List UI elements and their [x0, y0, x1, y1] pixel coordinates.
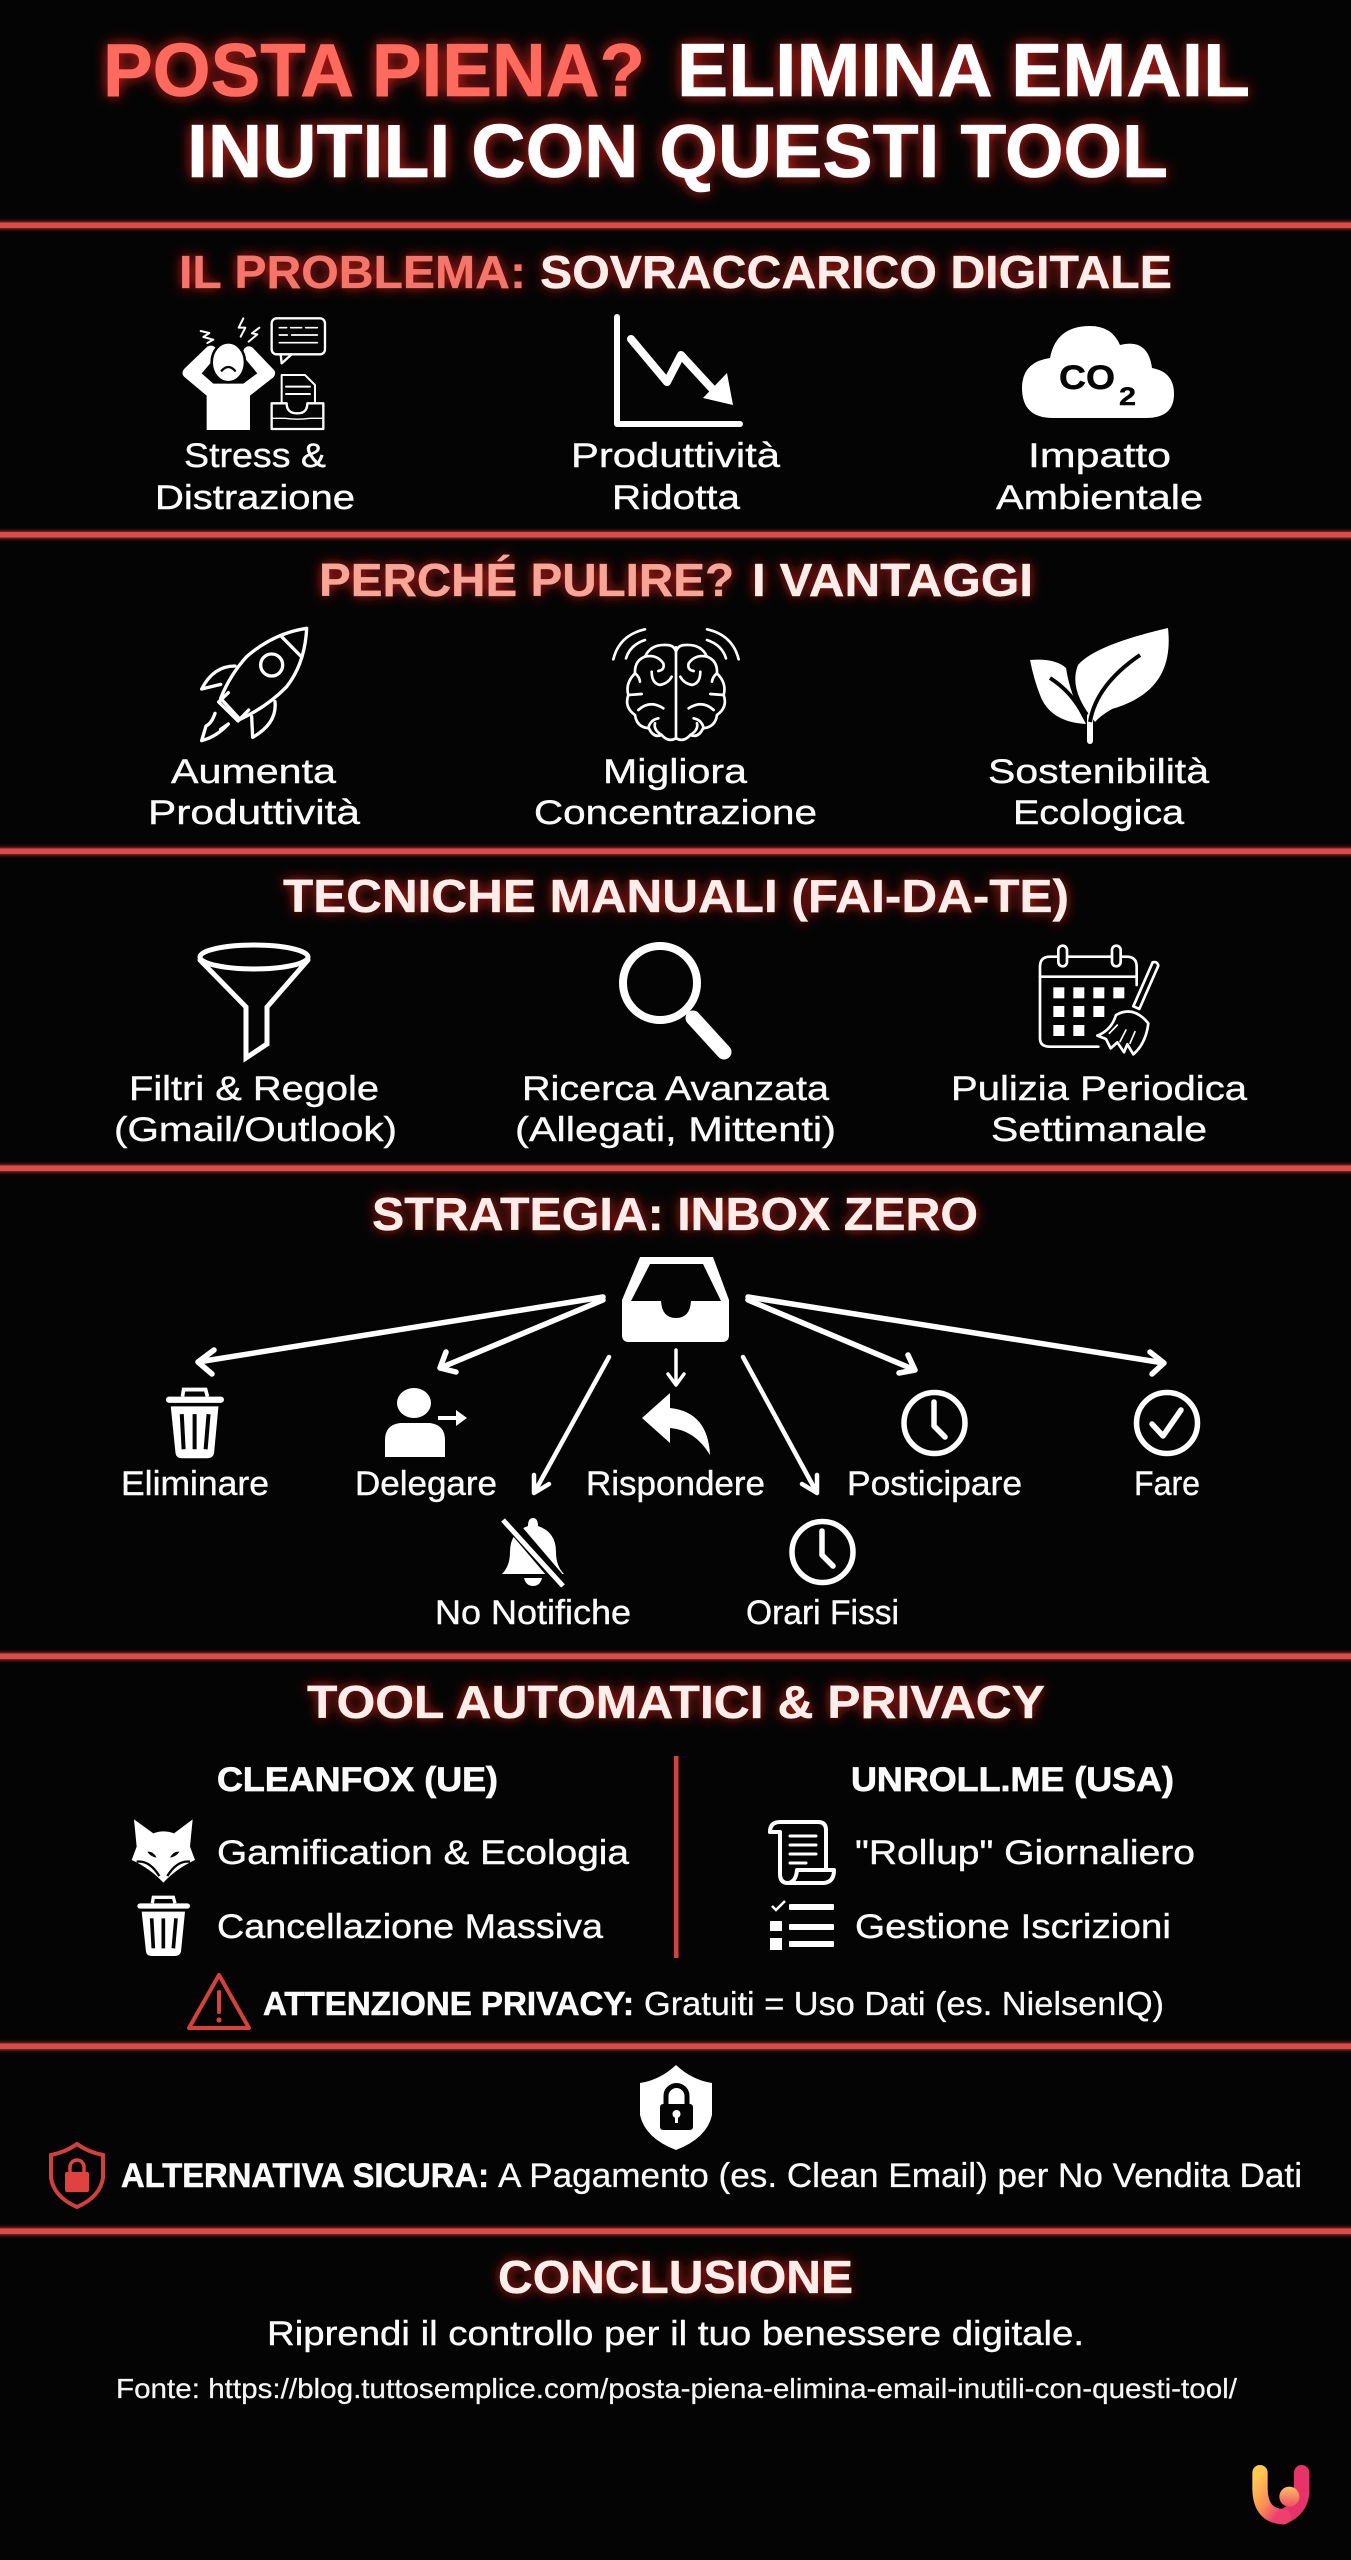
- label: filtri e regole: [114, 1070, 397, 1149]
- icon: calendar and broom: [1040, 946, 1158, 1054]
- label: impatto ambientale: Ambientale: [996, 479, 1203, 517]
- label: stress e distrazione: Distrazione: [155, 479, 355, 517]
- label: stress e distrazione: Stress &: [184, 437, 326, 475]
- heading: il problema: IL PROBLEMA:: [179, 246, 526, 298]
- label: delegare: Delegare: [355, 1465, 497, 1503]
- icon: rocket: [202, 628, 307, 741]
- label: cancellazione: Cancellazione Massiva: [217, 1908, 603, 1946]
- heading: il problema: SOVRACCARICO DIGITALE: [540, 246, 1172, 298]
- label: aumenta produttivita: Aumenta: [171, 753, 336, 791]
- label: sostenibilita ecologica: Sostenibilità: [988, 753, 1209, 791]
- icon: co2 cloud: 2: [1119, 383, 1136, 411]
- icon: magnifier: [623, 946, 724, 1052]
- text: source: Fonte: https://blog.tuttosemplice.com/posta-piena-elimina-email-inutili-con-questi-tool/: [116, 2373, 1237, 2404]
- callout: alternativa sicura: [121, 2157, 1302, 2195]
- panel: alternativa sicura: [51, 2065, 1302, 2207]
- callout: alternativa sicura: ALTERNATIVA SICURA:: [121, 2157, 489, 2195]
- dividers: [0, 222, 1351, 2234]
- label: migliora concentrazione: Migliora: [603, 753, 747, 791]
- arrows: [198, 1297, 1164, 1493]
- label: sostenibilita ecologica: Ecologica: [1013, 794, 1184, 832]
- label: produttivita ridotta: Ridotta: [612, 479, 740, 517]
- title: INUTILI CON QUESTI TOOL: [187, 109, 1168, 193]
- title: ELIMINA EMAIL: [677, 28, 1250, 112]
- label: gestione iscrizioni: Gestione Iscrizioni: [855, 1908, 1171, 1946]
- heading: strategia inbox zero: STRATEGIA: INBOX ZERO: [372, 1188, 978, 1240]
- text: conclusion line: Riprendi il controllo per il tuo benessere digitale.: [267, 2315, 1084, 2353]
- icon: checklist: [770, 1901, 834, 1950]
- label: filtri e regole: (Gmail/Outlook): [114, 1111, 397, 1149]
- panel: inbox zero: [121, 1188, 1200, 1632]
- icon: clock orari fissi: [792, 1522, 853, 1582]
- callout: alternativa sicura: A Pagamento (es. Clean Email) per No Vendita Dati: [498, 2157, 1302, 2195]
- label: migliora concentrazione: [534, 753, 817, 832]
- label: orari fissi: Orari Fissi: [746, 1594, 899, 1632]
- icon: warning triangle: [189, 1975, 249, 2028]
- label: ricerca avanzata: Ricerca Avanzata: [522, 1070, 829, 1108]
- icon: scroll: [770, 1822, 834, 1883]
- panel: tool automatici: [132, 1676, 1195, 2028]
- label: migliora concentrazione: Concentrazione: [534, 794, 817, 832]
- icon: red shield lock: [51, 2144, 103, 2207]
- callout: attenzione privacy: ATTENZIONE PRIVACY:: [263, 1985, 634, 2022]
- icon: delegate person: [385, 1388, 467, 1457]
- icon: stress: [182, 318, 325, 430]
- panel: il problema: [155, 246, 1203, 517]
- icon: trash: [166, 1390, 224, 1458]
- label: aumenta produttivita: [148, 753, 360, 832]
- icon: logo: [1260, 2473, 1302, 2517]
- icon: co2 cloud: CO: [1059, 359, 1115, 397]
- label: impatto ambientale: Impatto: [1028, 437, 1171, 475]
- heading: perche pulire: PERCHÉ PULIRE?: [319, 554, 734, 606]
- label: filtri e regole: Filtri & Regole: [129, 1070, 379, 1108]
- label: no notifiche: No Notifiche: [435, 1594, 631, 1632]
- heading: il problema: [179, 246, 1172, 298]
- icon: bell muted: [502, 1518, 564, 1586]
- title: POSTA PIENA?: [103, 28, 645, 112]
- label: fare: Fare: [1134, 1465, 1200, 1503]
- label: pulizia periodica: Settimanale: [991, 1111, 1207, 1149]
- label: sostenibilita ecologica: [988, 753, 1209, 832]
- panel: tecniche manuali: [114, 870, 1247, 1149]
- label: posticipare: Posticipare: [847, 1465, 1022, 1503]
- heading: perche pulire: [319, 554, 1033, 606]
- label: pulizia periodica: Pulizia Periodica: [951, 1070, 1247, 1108]
- icon: productivity chart: [617, 317, 740, 424]
- icon: clock posticipare: [904, 1392, 965, 1454]
- label: pulizia periodica: [951, 1070, 1247, 1149]
- icon: fox and trash: [132, 1819, 195, 1956]
- label: ricerca avanzata: [515, 1070, 836, 1149]
- heading: tecniche manuali: TECNICHE MANUALI (FAI-DA-TE): [283, 870, 1069, 922]
- icon: white shield lock: [640, 2065, 712, 2150]
- icon: funnel: [200, 945, 308, 1058]
- label: stress e distrazione: [155, 437, 355, 517]
- label: produttivita ridotta: [571, 437, 780, 517]
- label: rollup: "Rollup" Giornaliero: [855, 1834, 1195, 1872]
- icon: leaf: [1030, 628, 1169, 741]
- label: produttivita ridotta: Produttività: [571, 437, 780, 475]
- heading: unroll.me: UNROLL.ME (USA): [851, 1761, 1174, 1799]
- icon: inbox tray: [622, 1257, 729, 1342]
- label: impatto ambientale: [996, 437, 1203, 517]
- heading: perche pulire: I VANTAGGI: [752, 554, 1033, 606]
- label: gamification: Gamification & Ecologia: [217, 1834, 629, 1872]
- label: eliminare: Eliminare: [121, 1465, 269, 1503]
- icon: check circle: [1136, 1392, 1198, 1454]
- heading: tool automatici: TOOL AUTOMATICI & PRIVACY: [307, 1676, 1045, 1728]
- title: [103, 28, 1250, 193]
- panel: vantaggi: [148, 554, 1209, 832]
- icon: co2 cloud: [1022, 326, 1174, 418]
- icon: brain: [613, 629, 739, 740]
- heading: cleanfox: CLEANFOX (UE): [217, 1761, 498, 1799]
- callout: attenzione privacy: [263, 1985, 1164, 2022]
- callout: attenzione privacy: Gratuiti = Uso Dati (es. NielsenIQ): [644, 1985, 1164, 2022]
- divider: vertical: [674, 1756, 678, 1958]
- heading: conclusione: CONCLUSIONE: [498, 2251, 853, 2303]
- label: aumenta produttivita: Produttività: [148, 794, 360, 832]
- label: rispondere: Rispondere: [586, 1465, 765, 1503]
- icon: reply arrow: [642, 1393, 710, 1455]
- label: ricerca avanzata: (Allegati, Mittenti): [515, 1111, 836, 1149]
- panel: conclusione: [116, 2251, 1237, 2404]
